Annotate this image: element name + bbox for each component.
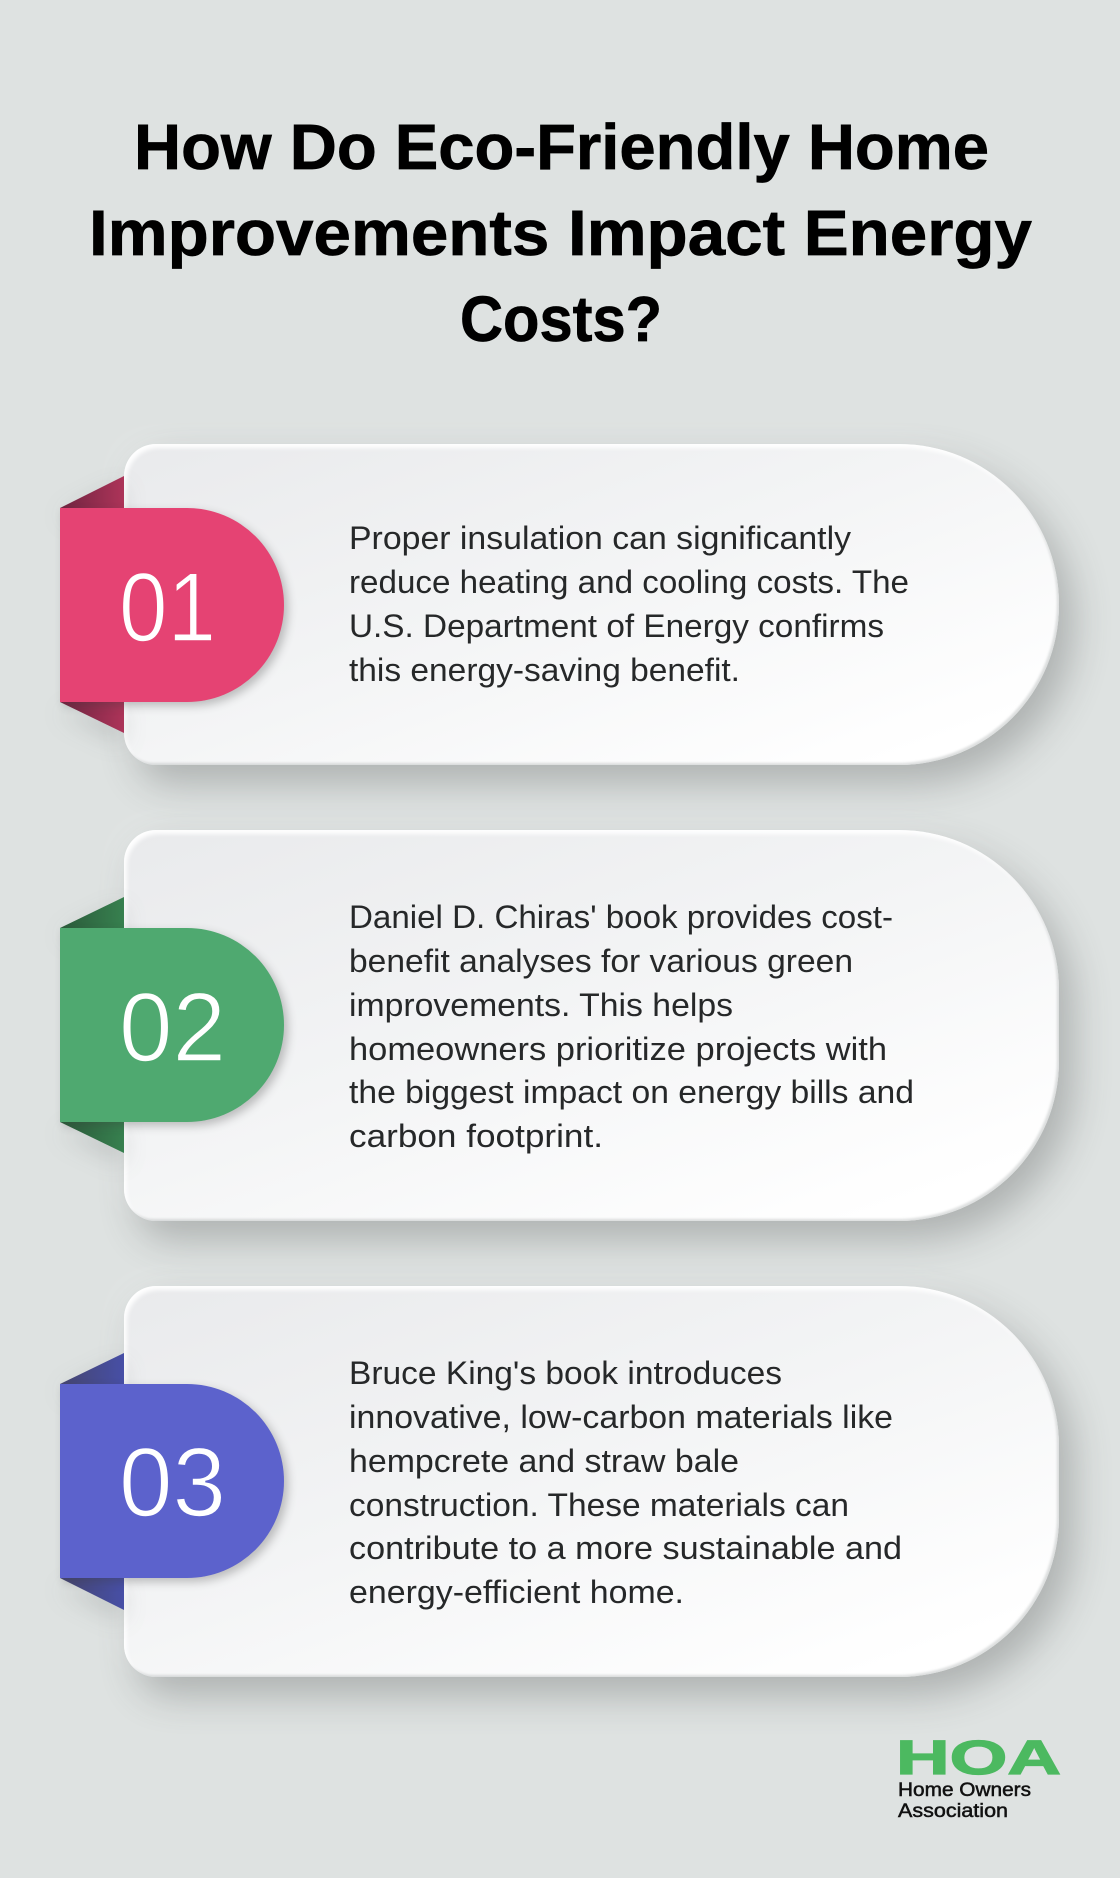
text: card 1 body: U.S. Department of Energy confirms bbox=[349, 608, 884, 644]
title bbox=[89, 111, 1032, 355]
badge: 02 bbox=[58, 897, 292, 1162]
text: card 2 body: Daniel D. Chiras' book provides cost- bbox=[349, 899, 893, 935]
text: card 2 body: the biggest impact on energy bills and bbox=[349, 1074, 914, 1110]
panel: card 3 bbox=[124, 1286, 1059, 1677]
logo: HOA Home Owners Association: Association bbox=[898, 1801, 1008, 1822]
text: card 3 body: contribute to a more sustainable and bbox=[349, 1530, 902, 1566]
text: card 2 body bbox=[349, 899, 914, 1154]
badge: 03 bbox=[58, 1353, 292, 1618]
text: card 1 body bbox=[349, 520, 909, 688]
title: How Do Eco-Friendly Home bbox=[134, 111, 989, 183]
text: card 3 body: innovative, low-carbon materials like bbox=[349, 1399, 893, 1435]
panel: card 2 bbox=[124, 830, 1059, 1221]
text: card 3 body: energy-efficient home. bbox=[349, 1574, 684, 1610]
logo: HOA Home Owners Association bbox=[896, 1734, 1061, 1822]
text: card 2 body: carbon footprint. bbox=[349, 1118, 603, 1154]
text: card 3 body: Bruce King's book introduces bbox=[349, 1355, 782, 1391]
panel: card 1 bbox=[124, 444, 1059, 765]
badge: 03: 03 bbox=[119, 1427, 226, 1537]
logo: HOA Home Owners Association: Home Owners bbox=[898, 1780, 1031, 1801]
title: Costs? bbox=[460, 283, 662, 355]
text: card 1 body: Proper insulation can significantly bbox=[349, 520, 852, 556]
text: card 1 body: this energy-saving benefit. bbox=[349, 652, 740, 688]
text: card 3 body: hempcrete and straw bale bbox=[349, 1443, 739, 1479]
text: card 2 body: benefit analyses for various green bbox=[349, 943, 853, 979]
text: card 2 body: homeowners prioritize projects with bbox=[349, 1031, 887, 1067]
text: card 3 body: construction. These materials can bbox=[349, 1487, 849, 1523]
title: Improvements Impact Energy bbox=[89, 197, 1032, 269]
text: card 3 body bbox=[349, 1355, 902, 1610]
text: card 1 body: reduce heating and cooling costs. The bbox=[349, 564, 909, 600]
text: card 2 body: improvements. This helps bbox=[349, 987, 733, 1023]
badge: 02: 02 bbox=[119, 972, 226, 1082]
badge: 01 bbox=[58, 476, 292, 742]
badge: 01: 01 bbox=[119, 552, 216, 662]
